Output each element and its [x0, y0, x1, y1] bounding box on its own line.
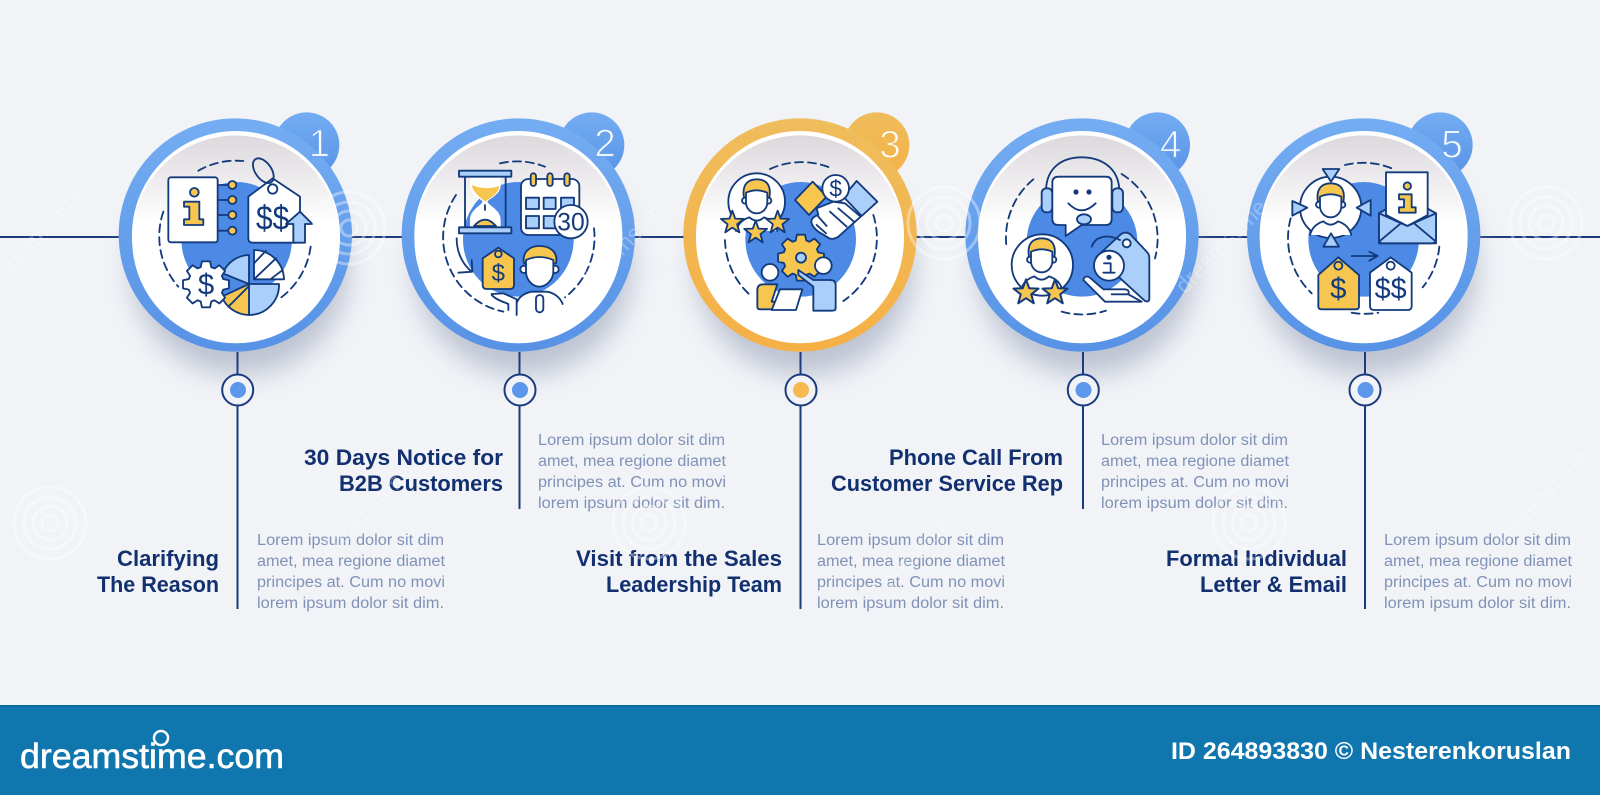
watermarks: dreamstime: [875, 489, 977, 593]
body text: step 5: principes at. Cum no movi: [1384, 574, 1572, 591]
number badge 5: [1247, 112, 1480, 352]
body text: step 3: lorem ipsum dolor sit dim.: [817, 595, 1004, 612]
body text: step 2: amet, mea regione diamet: [538, 453, 727, 470]
heading: step 3: Leadership Team: [606, 572, 782, 597]
panel: step 5 circle: [1247, 112, 1480, 375]
panel: step 4 circle: [965, 112, 1199, 375]
step 3 connector: [786, 352, 816, 609]
inner disc 4: [978, 131, 1186, 343]
shadow 3: [697, 158, 913, 375]
body text: step 1: principes at. Cum no movi: [257, 574, 445, 591]
step 5 connector: [1350, 352, 1380, 609]
panel: step 2 circle: [402, 112, 635, 375]
icon group 2: 30: [557, 210, 585, 237]
body text: step 1: amet, mea regione diamet: [257, 553, 446, 570]
body text: step 4: amet, mea regione diamet: [1101, 453, 1290, 470]
shadow 1: [132, 158, 348, 375]
heading: step 4: [831, 445, 1063, 496]
step 1 connector: [222, 352, 253, 609]
number badge 3: [683, 112, 917, 352]
footer logo: dreamstime.com: [20, 737, 284, 776]
icon group 1: [159, 155, 312, 315]
number badge 5: 5: [1441, 123, 1463, 166]
icon group 5: [1288, 163, 1439, 314]
heading: step 5: Letter & Email: [1200, 572, 1347, 597]
shadow 2: [415, 158, 632, 375]
body text: step 5: Lorem ipsum dolor sit dim: [1384, 532, 1571, 549]
horizontal timeline: [0, 236, 1600, 238]
icon group 3: $: [829, 176, 842, 202]
footer credit: ID 264893830 © Nesterenkoruslan: [1171, 738, 1571, 765]
heading: step 1: The Reason: [97, 572, 219, 597]
body text: step 4: lorem ipsum dolor sit dim.: [1101, 495, 1288, 512]
watermarks: dreamstime: [1490, 444, 1592, 548]
number badge 3: 3: [879, 123, 901, 166]
heading: step 4: Customer Service Rep: [831, 471, 1063, 496]
body text: step 2: lorem ipsum dolor sit dim.: [538, 495, 725, 512]
body text: step 4: principes at. Cum no movi: [1101, 474, 1289, 491]
footer bar: [0, 705, 1600, 795]
watermarks: dreamstime: [1170, 194, 1272, 298]
heading: step 3: [576, 546, 782, 597]
icon group 1: $: [198, 269, 214, 302]
heading: step 2: [304, 445, 503, 496]
heading: step 3: Visit from the Sales: [576, 546, 782, 571]
body text: step 1: Lorem ipsum dolor sit dim: [257, 532, 444, 549]
body text: step 2: principes at. Cum no movi: [538, 474, 726, 491]
icon group 2: [443, 161, 595, 315]
heading: step 5: [1166, 546, 1347, 597]
number badge 1: 1: [309, 123, 330, 166]
number badge 1: [119, 112, 352, 352]
body text: step 5: [1384, 532, 1573, 612]
watermarks: dreamstime: [315, 459, 417, 563]
icon group 4: [1006, 157, 1158, 314]
heading: step 1: [97, 546, 219, 597]
heading: step 2: B2B Customers: [339, 471, 503, 496]
body text: step 5: amet, mea regione diamet: [1384, 553, 1573, 570]
body text: step 3: Lorem ipsum dolor sit dim: [817, 532, 1004, 549]
panel: step 3 circle: [683, 112, 917, 375]
heading: step 2: 30 Days Notice for: [304, 445, 503, 470]
body text: step 2: [538, 432, 727, 512]
icon group 3: [721, 162, 877, 311]
inner disc 1: [132, 131, 340, 343]
body text: step 5: lorem ipsum dolor sit dim.: [1384, 595, 1571, 612]
body text: step 3: principes at. Cum no movi: [817, 574, 1005, 591]
step 2 connector: [504, 352, 536, 509]
number badge 2: 2: [594, 123, 616, 166]
body text: step 3: amet, mea regione diamet: [817, 553, 1006, 570]
watermarks: dreamstime: [575, 189, 677, 293]
inner disc 3: [696, 131, 904, 343]
number badge 2: [402, 112, 635, 352]
heading: step 4: Phone Call From: [889, 445, 1063, 470]
body text: step 4: [1101, 432, 1290, 512]
body text: step 4: Lorem ipsum dolor sit dim: [1101, 432, 1288, 449]
panel: step 1 circle: [119, 112, 352, 375]
icon group 1: $$: [256, 199, 289, 237]
watermarks: [0, 179, 1592, 593]
icon group 5: $: [1330, 273, 1346, 306]
icon group 2: $: [492, 260, 505, 287]
icon group 5: $$: [1375, 273, 1407, 306]
shadow 4: [978, 158, 1195, 375]
body text: step 1: [257, 532, 446, 612]
inner disc 2: [414, 131, 622, 343]
heading: step 1: Clarifying: [117, 546, 219, 571]
body text: step 2: Lorem ipsum dolor sit dim: [538, 432, 725, 449]
body text: step 1: lorem ipsum dolor sit dim.: [257, 595, 444, 612]
number badge 4: 4: [1160, 123, 1181, 166]
body text: step 3: [817, 532, 1006, 612]
number badge 4: [965, 112, 1199, 352]
inner disc 5: [1260, 131, 1468, 343]
step 4 connector: [1068, 352, 1099, 509]
shadow 5: [1260, 158, 1477, 375]
heading: step 5: Formal Individual: [1166, 546, 1347, 571]
